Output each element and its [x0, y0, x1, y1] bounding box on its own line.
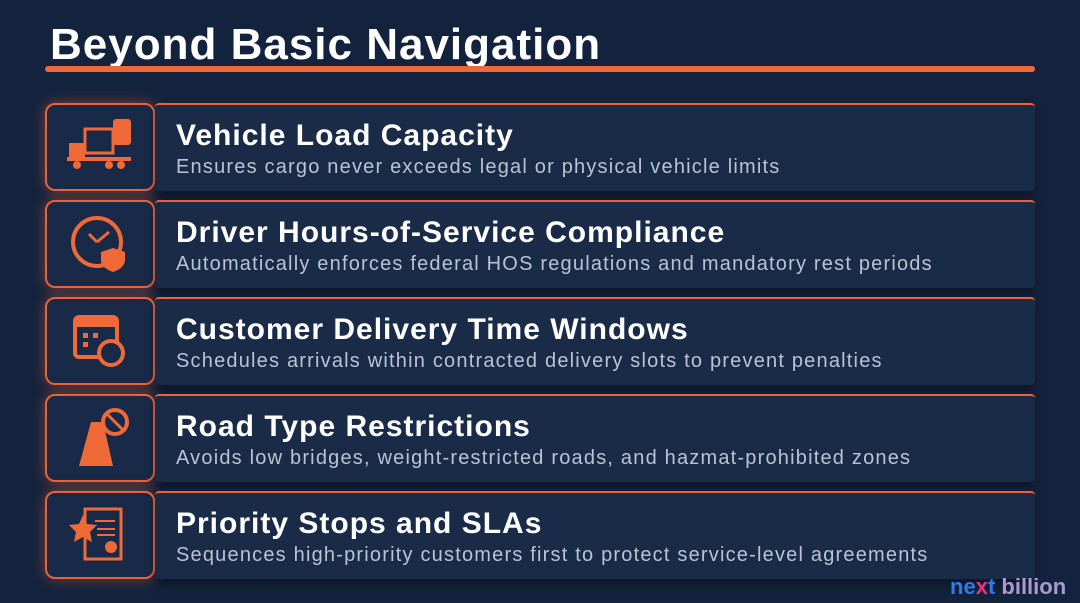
panel — [155, 491, 1035, 579]
panel: Sequences high-priority customers first to protect service-level agreements — [176, 544, 928, 566]
panel — [155, 200, 1035, 288]
icon: truck — [45, 103, 155, 191]
icon: calendar clock — [45, 297, 155, 385]
icon: road — [45, 394, 155, 482]
panel: Automatically enforces federal HOS regulations and mandatory rest periods — [176, 253, 933, 275]
panel: Driver Hours-of-Service Compliance — [176, 216, 725, 249]
panel: Road Type Restrictions — [176, 410, 531, 443]
row: HOS — [36, 192, 1036, 296]
logo: next billion — [950, 574, 1066, 599]
panel — [155, 394, 1035, 482]
title: Beyond Basic Navigation — [50, 20, 601, 69]
title underline — [45, 66, 1035, 72]
panel: Customer Delivery Time Windows — [176, 313, 689, 346]
row: vehicle load — [36, 94, 1036, 199]
panel: Avoids low bridges, weight-restricted roads, and hazmat-prohibited zones — [176, 447, 911, 469]
icon: clock shield — [45, 200, 155, 288]
row: priority — [36, 483, 1036, 588]
panel: Schedules arrivals within contracted delivery slots to prevent penalties — [176, 350, 883, 372]
panel: Vehicle Load Capacity — [176, 119, 514, 152]
row: time windows — [36, 289, 1036, 393]
icon: certificate star — [45, 491, 155, 579]
panel — [155, 103, 1035, 191]
panel: Priority Stops and SLAs — [176, 507, 542, 540]
row: road — [36, 386, 1036, 490]
panel: Ensures cargo never exceeds legal or physical vehicle limits — [176, 156, 780, 178]
panel — [155, 297, 1035, 385]
